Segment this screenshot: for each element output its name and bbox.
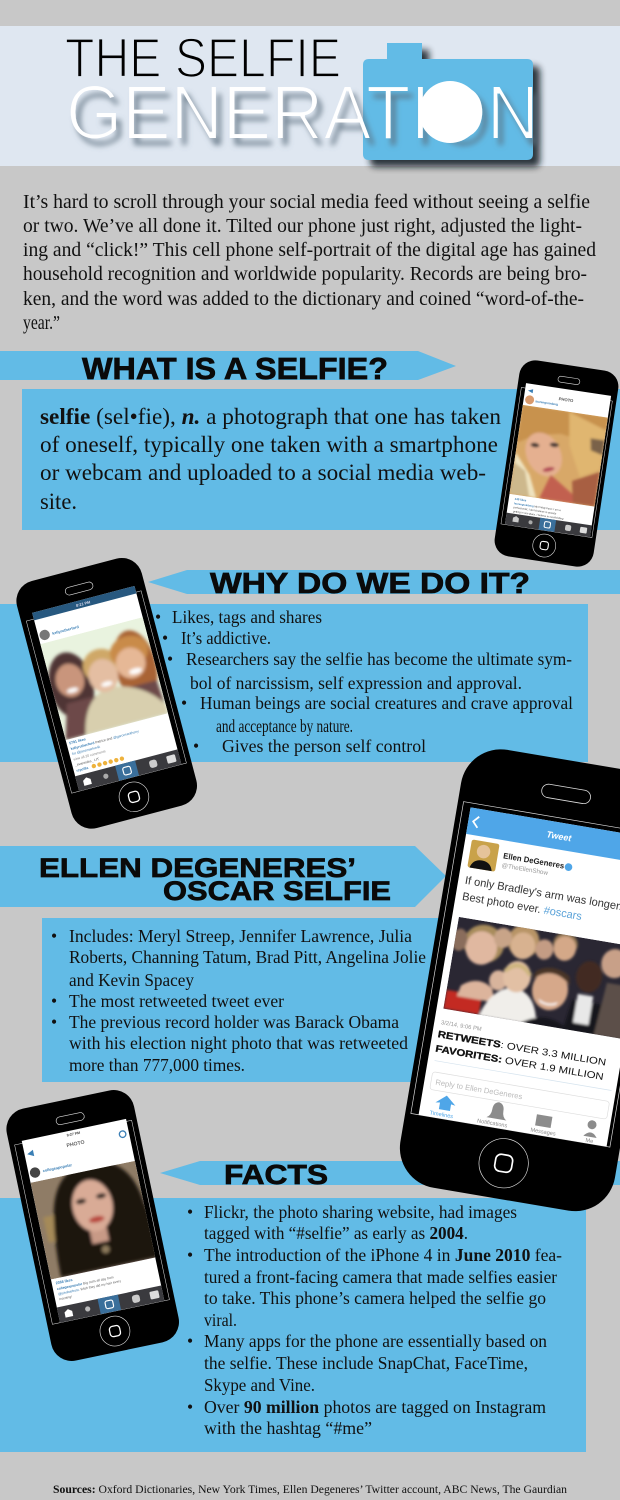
- panel: facts: Flickr, the photo sharing website, had images: [204, 1202, 517, 1222]
- phone: three women selfie: [12, 553, 202, 833]
- title banner: [0, 26, 620, 167]
- phone: three women selfie: for @janemarkovik: [72, 745, 101, 756]
- intro paragraph: It’s hard to scroll through your social media feed without seeing a selfie: [23, 192, 590, 213]
- tweet text: Best photo ever. #oscars: [461, 891, 583, 923]
- panel: why we do it: [0, 604, 588, 762]
- panel: why we do it: Gives the person self control: [222, 736, 426, 756]
- heading banner: what is a selfie: WHAT IS A SELFIE?: [82, 351, 388, 386]
- panel: definition: or webcam and uploaded to a social media web-: [40, 460, 486, 485]
- oscar selfie photo: [440, 913, 620, 1040]
- phone: three women selfie: 5791 likes: [69, 737, 86, 745]
- retweets and favorites: RETWEETS : OVER 3.3 MILLION: [437, 1029, 607, 1069]
- phone: blonde selfie: 445 likes: [515, 497, 527, 502]
- panel: facts: The introduction of the iPhone 4 in June 2010 fea-: [204, 1245, 562, 1265]
- phone: three women selfie: view all 20 comments: [73, 749, 106, 762]
- home button: [116, 779, 152, 815]
- phone: dark-haired selfie: 2368 likes: [55, 1278, 73, 1285]
- intro paragraph: ing and “click!” This cell phone self-portrait of the digital age has gained: [23, 240, 596, 261]
- phone: blonde selfie: [492, 358, 620, 569]
- phone: blonde selfie: getting in one place. I believe in overthinking: [513, 509, 564, 521]
- home button: [97, 1313, 133, 1349]
- panel: facts: with the hashtag “#me”: [204, 1418, 372, 1438]
- panel: facts: tagged with “#selfie” as early as 2004.: [204, 1223, 468, 1243]
- heading banner: facts: [160, 1159, 620, 1190]
- panel: facts: •: [187, 1202, 193, 1222]
- tweet header: @TheEllenShow: [501, 862, 549, 877]
- phone: three women selfie: rcpcilla: [76, 766, 89, 773]
- panel: facts: tured a front-facing camera that made selfies easier: [204, 1267, 557, 1287]
- intro paragraph: year.”: [23, 313, 60, 334]
- phone: blonde selfie: PHOTO: [558, 396, 574, 403]
- tweet text: If only Bradley's arm was longer.: [464, 875, 620, 913]
- panel: facts: to take. This phone’s camera helped the selfie go: [204, 1288, 546, 1308]
- intro paragraph: or two. We’ve all done it. Tilted our phone just right, adjusted the light-: [23, 216, 582, 237]
- tab bar: Timelines: [429, 1110, 454, 1120]
- phone: dark-haired selfie: morning!: [59, 1295, 72, 1301]
- heading banner: why do we do it: [148, 568, 620, 600]
- phone: dark-haired selfie: @johnbarbuto. Wish they did my hair every: [58, 1279, 122, 1296]
- panel: facts: viral.: [204, 1310, 237, 1330]
- panel: ellen facts: The previous record holder was Barack Obama: [69, 1012, 399, 1032]
- panel: ellen facts: with his election night photo that was retweeted: [69, 1033, 408, 1053]
- panel: definition: site.: [40, 489, 77, 514]
- panel: ellen facts: •: [51, 991, 57, 1011]
- phone: ellen tweet: Tweet: [546, 829, 573, 843]
- icon: camera lens: [419, 81, 481, 143]
- panel: ellen facts: more than 777,000 times.: [69, 1055, 245, 1075]
- tab bar: Notifications: [477, 1118, 508, 1129]
- heading banner: facts: FACTS: [224, 1159, 328, 1190]
- tweet text: [461, 875, 620, 929]
- intro paragraph: household recognition and worldwide popularity. Records are being bro-: [23, 264, 587, 285]
- panel: ellen facts: Roberts, Channing Tatum, Brad Pitt, Angelina Jolie: [69, 947, 426, 967]
- panel: ellen facts: and Kevin Spacey: [69, 970, 194, 990]
- tweet header: [467, 839, 574, 884]
- reply box: [430, 1072, 610, 1119]
- panel: facts: Skype and Vine.: [204, 1375, 315, 1395]
- panel: facts: •: [187, 1397, 193, 1417]
- panel: why we do it: •: [167, 649, 173, 669]
- phone: blonde selfie: laurengreinberg: [535, 399, 559, 407]
- heading banner: ellen oscar selfie: [0, 846, 446, 907]
- panel: why we do it: Likes, tags and shares: [172, 607, 322, 627]
- phone: three women selfie: kellyrutherford Patrice and @garcesanthony: [70, 729, 139, 751]
- panel: why we do it: and acceptance by nature.: [216, 716, 353, 736]
- phone: blonde selfie: laurengreinberg My Friday Face: I am a: [514, 501, 561, 512]
- panel: ellen facts: •: [51, 926, 57, 946]
- panel: facts: the selfie. These include SnapChat, FaceTime,: [204, 1353, 528, 1373]
- panel: facts: •: [187, 1245, 193, 1265]
- panel: facts: [0, 1198, 586, 1452]
- panel: why we do it: It’s addictive.: [181, 628, 271, 648]
- panel: facts: •: [187, 1331, 193, 1351]
- phone: ellen tweet: [394, 743, 620, 1217]
- panel: why we do it: •: [155, 607, 161, 627]
- panel: definition: [22, 389, 620, 530]
- panel: ellen facts: •: [51, 1012, 57, 1032]
- panel: why we do it: •: [162, 628, 168, 648]
- phone: dark-haired selfie: 9:27 PM: [66, 1131, 81, 1138]
- panel: ellen facts: [42, 918, 442, 1082]
- panel: why we do it: •: [193, 736, 199, 756]
- heading banner: what is a selfie: [0, 351, 456, 386]
- retweets and favorites: [434, 1029, 607, 1083]
- panel: ellen facts: The most retweeted tweet ever: [69, 991, 284, 1011]
- phone: three women selfie: 8:21 PM: [75, 599, 91, 608]
- retweets and favorites: FAVORITES: OVER 1.9 MILLION: [434, 1044, 604, 1083]
- panel: why we do it: •: [181, 693, 187, 713]
- heading banner: ellen oscar selfie: ELLEN DEGENERES’: [39, 853, 356, 883]
- phone: three women selfie: _evanrides_ LIT: [73, 757, 100, 768]
- panel: why we do it: bol of narcissism, self expression and approval.: [190, 673, 522, 693]
- home button: [475, 1135, 532, 1192]
- panel: why we do it: Human beings are social creatures and crave approval: [200, 693, 573, 713]
- reply box: Reply to Ellen DeGeneres: [435, 1078, 523, 1101]
- panel: ellen facts: Includes: Meryl Streep, Jennifer Lawrence, Julia: [69, 926, 412, 946]
- home button: [531, 533, 557, 559]
- date stamp: 3/2/14, 9:06 PM: [440, 1020, 482, 1033]
- tab bar: [429, 1091, 600, 1146]
- panel: definition: of oneself, typically one taken with a smartphone: [40, 432, 498, 457]
- phone: dark-haired selfie: PHOTO: [66, 1140, 85, 1149]
- tweet header: Ellen DeGeneres: [503, 851, 565, 871]
- panel: facts: Over 90 million photos are tagged on Instagram: [204, 1397, 546, 1417]
- phone: dark-haired selfie: [3, 1086, 183, 1365]
- intro paragraph: ken, and the word was added to the dictionary and coined “word-of-the-: [23, 289, 584, 310]
- heading banner: ellen oscar selfie: OSCAR SELFIE: [163, 876, 391, 906]
- sources line: Sources: Oxford Dictionaries, New York Times, Ellen Degeneres’ Twitter account, ABC News, The Gaurdian: [53, 1484, 567, 1496]
- panel: why we do it: Researchers say the selfie has become the ultimate sym-: [186, 649, 572, 669]
- phone: three women selfie: kellyrutherford: [52, 624, 80, 636]
- title line two: GENERATION: [66, 70, 539, 156]
- heading banner: why do we do it: WHY DO WE DO IT?: [210, 568, 530, 600]
- phone: dark-haired selfie: collegeapopular: [42, 1162, 73, 1173]
- panel: facts: Many apps for the phone are essentially based on: [204, 1331, 547, 1351]
- icon: camera: [363, 43, 540, 167]
- phone: blonde selfie: perfectionist. I don't believe in anxiety: [513, 505, 557, 516]
- panel: definition: selfie (sel•fie), n. a photograph that one has taken: [40, 404, 501, 429]
- phone: dark-haired selfie: collegeapopular Big curls all day from: [57, 1275, 114, 1291]
- intro paragraph: [23, 192, 596, 334]
- tab bar: Me: [585, 1138, 594, 1145]
- title line one: THE SELFIE: [65, 26, 341, 89]
- tab bar: Messages: [530, 1127, 556, 1138]
